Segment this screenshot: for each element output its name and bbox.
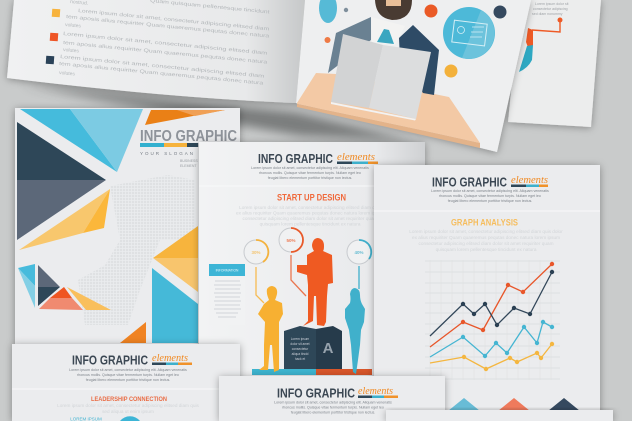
figure: blue woman	[345, 288, 365, 374]
gauge: blue 40%: 40%	[354, 250, 364, 255]
intro text: rhoncus mollis. Quisque vitae fermentum turpis. Nullam eget leo	[282, 406, 384, 410]
heading bar	[511, 184, 548, 187]
series: navy	[430, 270, 554, 336]
info box: INFORMATION	[216, 268, 239, 272]
pedestal: aliqua tincid	[292, 352, 309, 356]
series: blue	[430, 320, 554, 358]
brochure page text and bullets	[46, 0, 271, 87]
elements label: elements	[358, 385, 393, 397]
intro text: rhoncus mollis. Quisque vitae fermentum turpis. Nullam eget leo	[259, 171, 361, 175]
section body	[57, 403, 200, 414]
pedestal: Lorem ipsum	[291, 337, 310, 341]
brochure body text: Lorem ipsum dolor sit amet, consectetur adipiscing elitsed diam	[78, 8, 269, 32]
cover triangles	[17, 109, 225, 343]
gauge: red 50%: 50%	[286, 238, 296, 243]
pedestal: dolor sit amet	[290, 342, 310, 346]
desk	[297, 73, 480, 143]
open book on desk	[331, 34, 383, 108]
section body: consectetur adipiscing elitsed diam dolor sit amet requiriter quam	[419, 241, 554, 246]
intro text: feugiat libero elementum porttitor tristique non lectus.	[86, 378, 170, 382]
section body: Lorem ipsum dolor sit amet, consectetur adipiscing elitsed diam quis	[239, 205, 382, 210]
heading: INFO GRAPHIC	[277, 386, 355, 400]
bullet: navy	[46, 56, 54, 64]
brochure body text: tem aposis alius requiriter Quam quaeremus pequtas donec natura	[59, 61, 264, 87]
brochure body text: volutes	[65, 22, 82, 30]
section body	[409, 229, 563, 252]
gauge: blue 40%	[347, 240, 371, 289]
section body	[236, 205, 384, 226]
brochure body text: volutes	[63, 47, 80, 55]
illustration: businessman at desk	[297, 0, 506, 148]
heading: INFO GRAPHIC	[432, 174, 507, 190]
elements label: elements	[152, 352, 188, 364]
section body: consectetur adipiscing elitsed diam dolor sit amet requiriter quam	[243, 216, 378, 221]
heading bar	[152, 362, 192, 365]
series: yellow	[430, 342, 554, 371]
section body: quisquam lorem pellentesque tincidunt ex natura	[260, 222, 361, 226]
pedestal: A	[323, 340, 334, 357]
rear page: chart fragment: sed diam nonummy	[532, 12, 563, 16]
gauge: yellow 30%	[244, 240, 268, 303]
section body: quisquam lorem pellentesque tincidunt ex natura	[436, 247, 537, 252]
brochure body text: tem aposis alius requiriter Quam quaeremus pequtas donec natura	[66, 14, 270, 40]
rear page: chart fragment: Lorem ipsum dolor sit	[535, 2, 568, 6]
intro text	[274, 400, 392, 414]
intro text: Lorem ipsum dolor sit amet, consectetur adipiscing elit. Aliquam venenatis	[69, 368, 187, 372]
panel: leadership connection page	[12, 344, 240, 421]
line chart	[425, 260, 560, 380]
brochure body text: Lorem ipsum dolor sit amet, consectetur adipiscing elitsed diam	[63, 31, 267, 57]
section body: ex alius requiriter Quam quaeremus pequtas donec natura lorem ipsum	[412, 235, 560, 240]
info box	[209, 264, 245, 325]
elements label: elements	[511, 174, 548, 186]
brochure body text	[59, 0, 271, 87]
rear page: chart fragment	[508, 0, 601, 127]
panel: second lower page	[219, 376, 445, 421]
brochure body text: tem aposis alius requiriter Quam quaeremus pequtas donec natura	[63, 40, 268, 66]
bullet: red	[50, 33, 58, 41]
suit	[328, 17, 371, 73]
intro text	[251, 166, 369, 180]
intro text: Lorem ipsum dolor sit amet, consectetur adipiscing elit. Aliquam venenatis	[431, 189, 549, 193]
panel: cover page	[15, 108, 240, 345]
bullet: yellow	[52, 9, 60, 17]
pedestal	[284, 326, 342, 369]
head and beard	[375, 0, 412, 20]
panel: graph analysis page	[374, 165, 600, 421]
triangle: red	[498, 398, 530, 411]
intro text: Lorem ipsum dolor sit amet, consectetur adipiscing elit. Aliquam venenatis	[251, 166, 369, 170]
gauge: red 50%	[279, 228, 306, 296]
cover heading: INFO GRAPHIC	[140, 128, 237, 145]
heading: INFO GRAPHIC	[72, 352, 148, 368]
heading bar	[358, 396, 398, 398]
intro text: rhoncus mollis. Quisque vitae fermentum turpis. Nullam eget leo	[439, 194, 541, 198]
blue label and circle	[70, 416, 140, 421]
icon: ID card circle	[443, 7, 495, 59]
dotted world map	[78, 175, 195, 325]
intro text: rhoncus mollis. Quisque vitae fermentum turpis. Nullam eget leo	[77, 373, 179, 377]
tie	[377, 29, 394, 44]
section title: START UP DESIGN	[277, 192, 346, 202]
intro text: feugiat libero elementum porttitor tristique non lectus.	[448, 199, 532, 203]
section body: sed aliqua ut enim ipsum	[102, 409, 154, 414]
panel: cover page: ELEMENT	[180, 164, 197, 168]
pedestal: hack et	[295, 357, 305, 361]
section body: Lorem ipsum dolor sit amet, consectetur adipiscing elitsed diam quis	[57, 403, 200, 408]
panel: third lower page	[386, 410, 613, 421]
cover slogan: YOUR SLOGAN	[140, 151, 195, 156]
base bar	[252, 369, 372, 375]
heading bar	[337, 162, 378, 164]
series: orange	[430, 262, 554, 347]
intro text: Lorem ipsum dolor sit amet, consectetur adipiscing elit. Aliquam venenatis	[274, 400, 392, 404]
elements label: elements	[337, 151, 375, 163]
triangle: blue	[448, 398, 480, 411]
figure: yellow man	[258, 286, 283, 372]
section title: GRAPH ANALYSIS	[451, 218, 518, 228]
open brochure	[7, 0, 531, 152]
section body: ex alius requiriter Quam quaeremus pequtas donec natura lorem ipsum	[236, 210, 384, 216]
cover colour bar	[140, 143, 234, 147]
figure: red man	[297, 238, 333, 326]
intro text	[431, 189, 549, 203]
pedestal: consectetur	[292, 347, 309, 351]
icon: coloured dots	[319, 0, 506, 78]
rear page: chart fragment: consectetur adipiscing	[533, 7, 568, 11]
panel: cover page: BUSINESS	[180, 159, 198, 163]
brochure body text: Lorem ipsum dolor sit amet, consectetur adipiscing elitsed diam	[60, 54, 264, 80]
intro text: feugiat libero elementum porttitor tristique non lectus.	[291, 410, 375, 414]
gauge: yellow 30%: 30%	[251, 250, 261, 255]
triangle: navy	[548, 398, 580, 411]
brochure body text: volutes	[59, 70, 76, 78]
heading: INFO GRAPHIC	[258, 151, 333, 166]
panel: start up design page	[199, 142, 425, 378]
section body: Lorem ipsum dolor sit amet, consectetur adipiscing elitsed diam quis dolor	[409, 229, 563, 234]
section title: LEADERSHIP CONNECTION	[91, 396, 167, 403]
intro text	[69, 368, 187, 382]
intro text: feugiat libero elementum porttitor tristique non lectus.	[268, 176, 352, 180]
shadow under brochure	[20, 84, 420, 142]
